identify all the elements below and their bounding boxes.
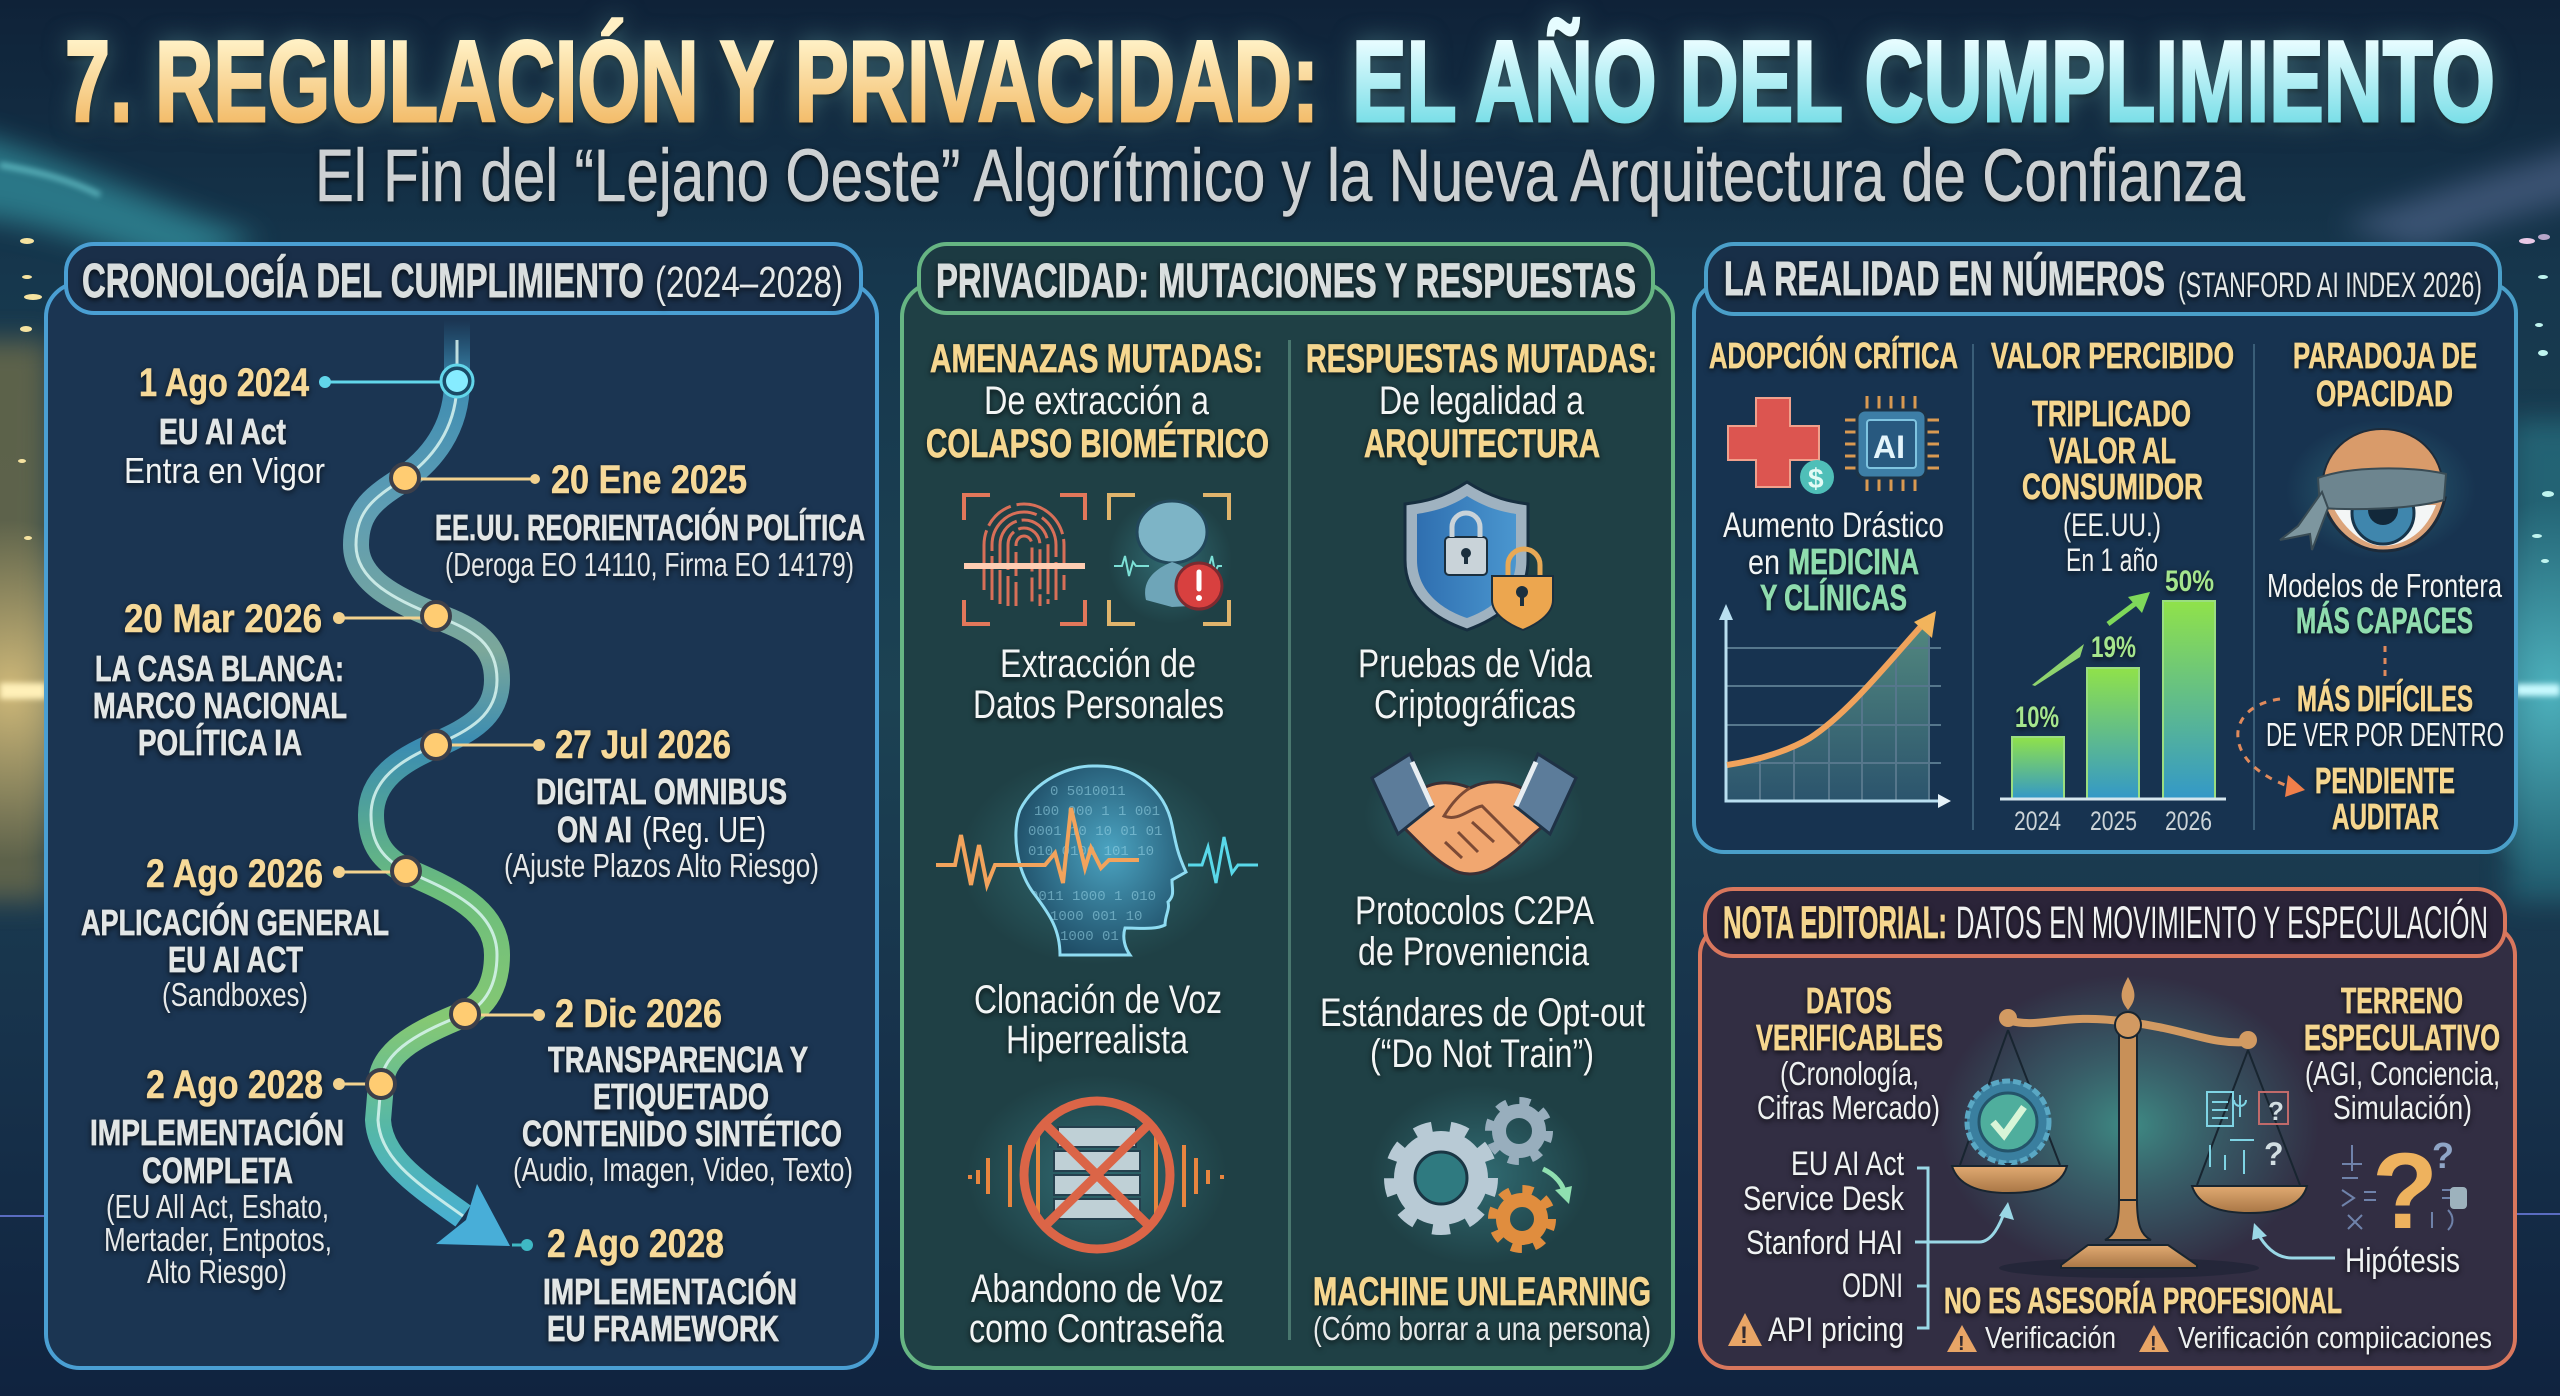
icon: voice clone head: 0001 10 10 01 01	[1028, 824, 1162, 840]
text: aumento drástico: Y CLÍNICAS	[1760, 577, 1907, 618]
event: 2 Ago 2028 implementación completa: COMPLETA	[142, 1150, 293, 1191]
column heading: respuestas mutadas: ARQUITECTURA	[1364, 422, 1600, 466]
column heading: respuestas mutadas	[1306, 337, 1657, 466]
event: 27 Jul 2026: DIGITAL OMNIBUS	[536, 771, 787, 812]
event: 2 Ago 2028 implementación completa: Mertader, Entpotos,	[104, 1221, 332, 1258]
text: protocolos C2PA	[1355, 889, 1594, 974]
event: 2 Ago 2026: 2 Ago 2026	[146, 852, 323, 896]
event: 2 Ago 2026: EU AI ACT	[168, 939, 303, 980]
icon: speculative symbols: ?	[2264, 1136, 2284, 1172]
text: pendiente auditar: AUDITAR	[2332, 796, 2439, 837]
note: verificación warnings: Verificación compiicaciones	[2178, 1320, 2492, 1355]
event: 27 Jul 2026: 27 Jul 2026	[555, 723, 731, 767]
icon: balance scale	[1939, 975, 2319, 1278]
text: modelos de frontera: MÁS CAPACES	[2296, 600, 2473, 641]
icon: medical cross and AI chip	[1728, 396, 1939, 494]
text: clonación de voz: Hiperrealista	[1006, 1018, 1189, 1062]
panel heading: nota editorial	[1705, 889, 2505, 956]
column heading: respuestas mutadas: RESPUESTAS MUTADAS:	[1306, 337, 1657, 381]
text: abandono de voz: Abandono de Voz	[971, 1267, 1224, 1311]
event: 2 Ago 2026: (Sandboxes)	[162, 976, 308, 1013]
icon: warning API pricing: !	[1740, 1322, 1748, 1349]
text: triplicado: (EE.UU.)	[2063, 507, 2161, 543]
icon: voice clone head: 1000 01	[1060, 929, 1119, 945]
title: 7. REGULACIÓN Y PRIVACIDAD:	[65, 18, 1319, 146]
event: 27 Jul 2026	[504, 723, 819, 884]
list: fuentes verificables: EU AI Act	[1791, 1145, 1904, 1183]
text: aumento drástico: MEDICINA	[1788, 541, 1919, 582]
event: 2 Ago 2028 implementación completa: 2 Ago 2028	[146, 1063, 323, 1107]
bar chart: valor al consumidor: 2024	[2014, 806, 2061, 836]
text: datos verificables: VERIFICABLES	[1756, 1017, 1943, 1058]
icon: voice clone head: 0011 1000 1 010	[1030, 889, 1156, 905]
timeline road with arrow	[356, 320, 510, 1246]
event: 27 Jul 2026: (Ajuste Plazos Alto Riesgo)	[504, 847, 819, 884]
text: hipótesis: Hipótesis	[2345, 1242, 2460, 1280]
icon: medical cross and AI chip: AI	[1873, 429, 1905, 465]
text: no es asesoría profesional: NO ES ASESORÍA PROFESIONAL	[1944, 1280, 2342, 1321]
icon: voice clone head	[936, 755, 1258, 965]
list: fuentes verificables	[1743, 1145, 1905, 1349]
text: abandono de voz	[969, 1267, 1225, 1351]
icon: question mark cluster	[2342, 1130, 2467, 1251]
icon: question mark cluster: ?	[2372, 1130, 2438, 1251]
icon: voice clone head: 1000 001 10	[1050, 909, 1142, 925]
event: 2 Dic 2026: (Audio, Imagen, Video, Texto)	[513, 1151, 853, 1188]
panel: nota editorial	[1700, 889, 2515, 1368]
event: 2 Dic 2026	[513, 992, 853, 1188]
text: terreno especulativo: TERRENO	[2341, 980, 2463, 1021]
event: 2 Ago 2026	[81, 852, 389, 1013]
note: verificación warnings: !	[1958, 1333, 1965, 1355]
text: triplicado: En 1 año	[2066, 542, 2158, 578]
chart: adoption curve	[1719, 604, 1951, 808]
text: pendiente auditar	[2315, 760, 2455, 837]
text: aumento drástico: Aumento Drástico	[1723, 506, 1944, 545]
event: 20 Mar 2026: 20 Mar 2026	[124, 597, 322, 641]
column: valor percibido: VALOR PERCIBIDO	[1991, 335, 2234, 376]
bar chart: valor al consumidor: 10%	[2015, 701, 2059, 734]
text: machine unlearning	[1313, 1270, 1651, 1347]
text: terreno especulativo	[2304, 980, 2500, 1126]
text: estándares opt-out: (“Do Not Train”)	[1370, 1032, 1594, 1076]
note: verificación warnings: !	[2150, 1333, 2157, 1355]
list: fuentes verificables: Service Desk	[1743, 1180, 1905, 1218]
text: pruebas de vida: Criptográficas	[1374, 683, 1576, 727]
event: 1 Ago 2024	[124, 361, 325, 491]
column heading: amenazas mutadas: COLAPSO BIOMÉTRICO	[926, 421, 1269, 466]
text: triplicado: TRIPLICADO	[2032, 393, 2191, 434]
panel: cronología del cumplimiento	[46, 244, 877, 1368]
note: verificación warnings: Verificación	[1985, 1320, 2116, 1355]
event: 2 Dic 2026: TRANSPARENCIA Y	[548, 1039, 808, 1080]
icon: verified badge	[1967, 1081, 2049, 1163]
panel heading: cronología: (2024–2028)	[655, 258, 843, 307]
text: protocolos C2PA: de Proveniencia	[1358, 930, 1590, 974]
panel heading: privacidad: PRIVACIDAD: MUTACIONES Y RESPUESTAS	[936, 255, 1636, 308]
event: 20 Ene 2025: 20 Ene 2025	[551, 458, 747, 502]
bar chart: valor al consumidor: 19%	[2091, 631, 2136, 664]
column: paradoja de opacidad: PARADOJA DE	[2293, 335, 2477, 376]
note: verificación warnings	[1947, 1320, 2492, 1355]
text: clonación de voz: Clonación de Voz	[974, 978, 1222, 1022]
column heading: amenazas mutadas: De extracción a	[984, 379, 1210, 423]
bar chart: valor al consumidor: 2025	[2090, 806, 2137, 836]
column: paradoja de opacidad	[2238, 335, 2504, 837]
list: fuentes verificables: Stanford HAI	[1746, 1224, 1903, 1262]
bar chart: valor al consumidor	[2000, 565, 2226, 836]
text: datos verificables	[1756, 980, 1943, 1126]
event: 1 Ago 2024: EU AI Act	[159, 411, 286, 452]
event: 2 Ago 2028 framework: EU FRAMEWORK	[547, 1308, 779, 1349]
text: terreno especulativo: (AGI, Conciencia,	[2305, 1055, 2500, 1092]
event: 2 Dic 2026: 2 Dic 2026	[555, 992, 722, 1036]
text: clonación de voz	[974, 978, 1222, 1062]
panel heading: privacidad	[919, 244, 1653, 313]
event: 20 Mar 2026: MARCO NACIONAL	[93, 685, 347, 726]
text: machine unlearning: MACHINE UNLEARNING	[1313, 1270, 1651, 1314]
text: pruebas de vida	[1358, 642, 1593, 727]
text: aumento drástico: en	[1748, 543, 1780, 582]
text: más difíciles	[2266, 678, 2504, 753]
icon: voice clone head: 100 000 1 1 001	[1034, 804, 1160, 820]
event: 20 Mar 2026: POLÍTICA IA	[138, 722, 302, 763]
event: 2 Ago 2028 implementación completa: (EU All Act, Eshato,	[106, 1188, 329, 1225]
column: adopción crítica: ADOPCIÓN CRÍTICA	[1709, 334, 1958, 376]
icon: gears	[1370, 1085, 1590, 1265]
text: más difíciles: MÁS DIFÍCILES	[2297, 678, 2473, 719]
list: fuentes verificables: ODNI	[1842, 1267, 1903, 1305]
arrow: dashed to pendiente	[2238, 699, 2305, 797]
column: adopción crítica	[1709, 334, 1958, 808]
text: extracción de datos personales: Datos Personales	[973, 683, 1224, 727]
event: 2 Ago 2028 implementación completa: IMPLEMENTACIÓN	[90, 1111, 344, 1153]
text: machine unlearning: (Cómo borrar a una persona)	[1313, 1310, 1651, 1347]
timeline connectors and nodes	[319, 365, 545, 1251]
event: 2 Ago 2028 framework: IMPLEMENTACIÓN	[543, 1270, 797, 1312]
text: abandono de voz: como Contraseña	[969, 1307, 1225, 1351]
event: 27 Jul 2026: (Reg. UE)	[642, 809, 766, 850]
text: protocolos C2PA: Protocolos C2PA	[1355, 889, 1594, 933]
bar chart: valor al consumidor: 2026	[2165, 806, 2212, 836]
panel heading: números: LA REALIDAD EN NÚMEROS	[1724, 251, 2165, 306]
arrow: hipótesis to pan	[2252, 1223, 2335, 1258]
text: pendiente auditar: PENDIENTE	[2315, 760, 2455, 801]
icon: voice clone head: 0 5010011	[1050, 784, 1126, 800]
text: pruebas de vida: Pruebas de Vida	[1358, 642, 1593, 686]
text: triplicado: VALOR AL	[2049, 430, 2176, 471]
icon: server prohibited	[967, 1075, 1227, 1275]
event: 20 Ene 2025: (Deroga EO 14110, Firma EO 14179)	[445, 546, 854, 583]
icon: fingerprint scan	[964, 495, 1085, 624]
text: aumento drástico	[1723, 506, 1944, 618]
icon: shield with padlocks	[1405, 482, 1553, 630]
text: estándares opt-out	[1320, 991, 1645, 1076]
icon: voice clone head: 010 0100 101 10	[1028, 844, 1154, 860]
event: 1 Ago 2024: Entra en Vigor	[124, 450, 325, 491]
column heading: amenazas mutadas: AMENAZAS MUTADAS:	[930, 337, 1263, 381]
panel: la realidad en números	[1694, 244, 2516, 852]
icon: blindfolded eye	[2280, 420, 2476, 560]
event: 20 Ene 2025: EE.UU. REORIENTACIÓN POLÍTICA	[435, 506, 865, 548]
text: modelos de frontera	[2267, 567, 2502, 641]
event: 20 Mar 2026: LA CASA BLANCA:	[95, 648, 344, 689]
column: paradoja de opacidad: OPACIDAD	[2316, 373, 2453, 414]
text: extracción de datos personales: Extracción de	[1000, 642, 1196, 686]
bar chart: valor al consumidor: 50%	[2165, 565, 2214, 598]
event: 20 Ene 2025	[435, 458, 865, 583]
event: 2 Ago 2028 implementación completa	[90, 1063, 344, 1290]
icon: speculative symbols	[2207, 1092, 2288, 1174]
icon: medical cross and AI chip: $	[1808, 463, 1824, 494]
panel: privacidad	[902, 244, 1673, 1368]
event: 27 Jul 2026: ON AI	[557, 809, 632, 850]
text: datos verificables: DATOS	[1806, 980, 1892, 1021]
icon: question mark cluster: ?	[2432, 1135, 2454, 1176]
panel heading: nota editorial: NOTA EDITORIAL:	[1723, 897, 1947, 948]
panel heading: cronología: CRONOLOGÍA DEL CUMPLIMIENTO	[82, 254, 644, 308]
event: 20 Mar 2026	[93, 597, 347, 763]
text: estándares opt-out: Estándares de Opt-out	[1320, 991, 1645, 1035]
event: 2 Ago 2028 framework	[543, 1222, 797, 1349]
column: valor percibido	[1991, 335, 2234, 836]
text: triplicado: CONSUMIDOR	[2022, 466, 2203, 507]
event: 1 Ago 2024: 1 Ago 2024	[139, 361, 310, 405]
event: 2 Ago 2028 framework: 2 Ago 2028	[547, 1222, 724, 1266]
text: terreno especulativo: Simulación)	[2333, 1089, 2472, 1126]
list: fuentes verificables: API pricing	[1768, 1311, 1904, 1349]
icon: handshake	[1364, 745, 1584, 885]
event: 2 Dic 2026: ETIQUETADO	[593, 1076, 769, 1117]
icon: cloned identity alert	[1108, 495, 1232, 624]
text: extracción de datos personales	[973, 642, 1224, 727]
icon: speculative symbols: ?	[2268, 1096, 2284, 1126]
event: 2 Dic 2026: CONTENIDO SINTÉTICO	[522, 1113, 842, 1154]
icon: warning API pricing	[1728, 1313, 1762, 1349]
arrow: bracket to badge	[1915, 1168, 2014, 1328]
text: datos verificables: Cifras Mercado)	[1757, 1089, 1940, 1126]
text: datos verificables: (Cronología,	[1780, 1055, 1919, 1092]
text: triplicado	[2022, 393, 2203, 578]
event: 2 Ago 2026: APLICACIÓN GENERAL	[81, 901, 389, 943]
panel heading: números	[1706, 244, 2500, 314]
event: 2 Ago 2028 implementación completa: Alto Riesgo)	[147, 1253, 287, 1290]
column heading: amenazas mutadas	[926, 337, 1269, 466]
column heading: respuestas mutadas: De legalidad a	[1379, 379, 1585, 423]
